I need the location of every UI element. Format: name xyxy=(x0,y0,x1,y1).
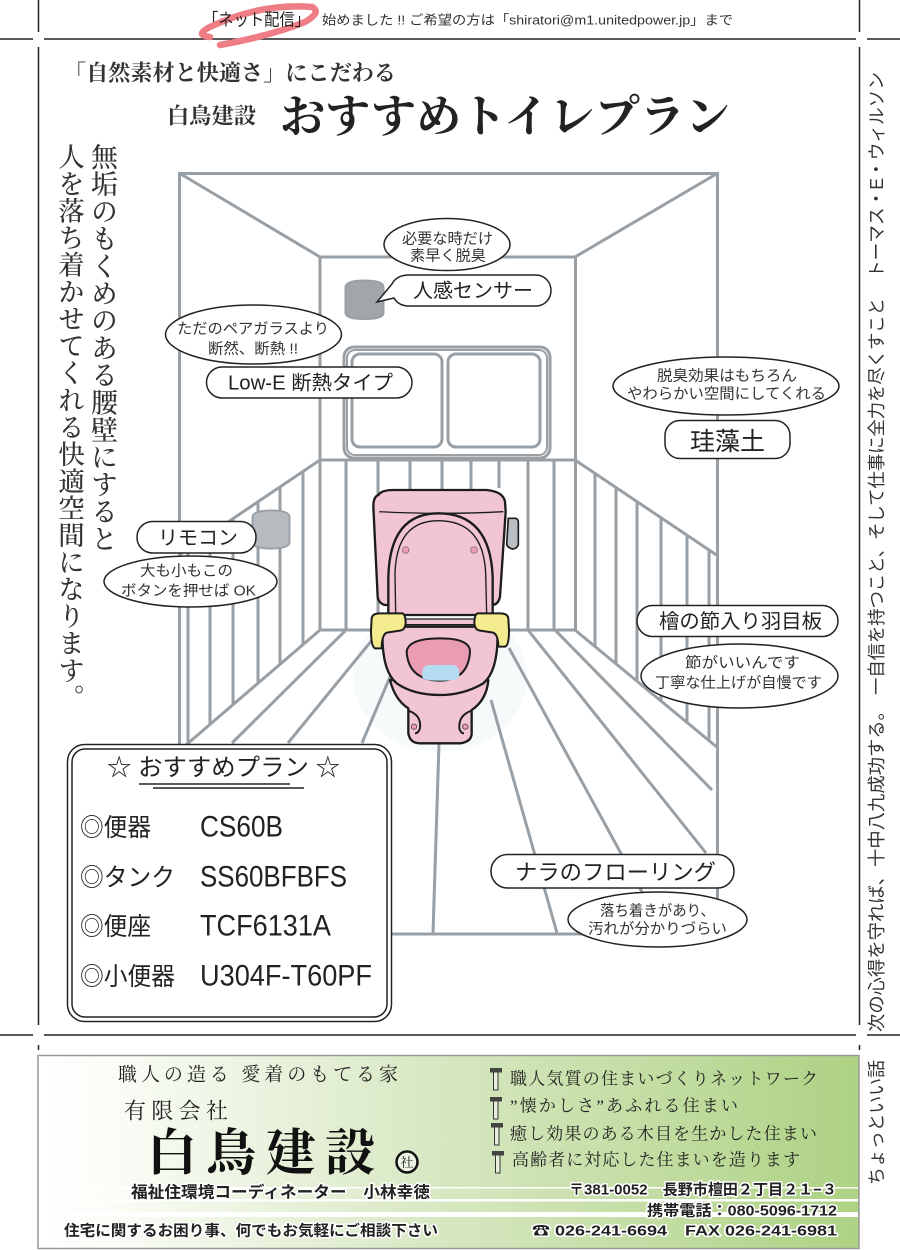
vertical copy: 無垢のもくめのある腰壁にすると xyxy=(87,143,118,552)
title xyxy=(64,60,730,142)
callout: cypress panelling: 節がいいんです xyxy=(685,654,800,672)
panel heading: ☆ おすすめプラン ☆ xyxy=(107,754,340,782)
panel: company footer xyxy=(38,1056,859,1248)
contact prompt: 住宅に関するお困り事、何でもお気軽にご相談下さい xyxy=(64,1222,438,1240)
feature list: 高齢者に対応した住まいを造ります xyxy=(512,1150,800,1170)
icon: hammers xyxy=(490,1068,504,1173)
row: toilet bowl: CS60B xyxy=(200,810,283,844)
row: seat: TCF6131A xyxy=(200,910,331,942)
callout: cypress panelling: 丁寧な仕上げが自慢です xyxy=(655,674,822,692)
side column quote xyxy=(867,72,887,1185)
row: urinal xyxy=(80,960,372,992)
icon: remote control xyxy=(252,510,290,548)
room line drawing xyxy=(179,173,718,934)
panel: recommended plan xyxy=(68,744,392,1022)
callout: diatomaceous earth: 脱臭効果はもちろん xyxy=(657,368,797,384)
contact details: 携帯電話：080-5096-1712 xyxy=(647,1202,837,1220)
callout: oak flooring: 落ち着きがあり、 xyxy=(600,902,715,920)
callout: sensor xyxy=(377,218,551,306)
icon: human sensor xyxy=(346,280,384,319)
callout: oak flooring: ナラのフローリング xyxy=(515,860,716,885)
callout: window: ただのペアガラスより xyxy=(177,320,329,338)
row: tank: SS60BFBFS xyxy=(200,860,347,894)
callout: diatomaceous earth xyxy=(613,357,839,458)
side column quote: 次の心得を守れば、十中八九成功する。 xyxy=(867,702,887,1032)
callout: window: 断然、断熱 !! xyxy=(208,340,298,358)
callout: cypress panelling xyxy=(637,606,838,708)
contact details xyxy=(532,1180,837,1240)
contact details: 〒381-0052 長野市檀田２丁目２１−３ xyxy=(569,1180,837,1198)
top notice xyxy=(203,10,733,30)
feature list: 職人気質の住まいづくりネットワーク xyxy=(510,1070,818,1088)
top notice: 始めました !! ご希望の方は「shiratori@m1.unitedpower.jp」まで xyxy=(322,12,733,28)
row: seat: ◎便座 xyxy=(80,913,151,941)
side column quote: 一自信を持つこと、そして仕事に全力を尽くすこと xyxy=(867,298,887,695)
vertical copy: 人を落ち着かせてくれる快適空間になります。 xyxy=(54,143,84,711)
contact details: ☎ 026-241-6694 FAX 026-241-6981 xyxy=(532,1222,837,1240)
subtitle: 「自然素材と快適さ」にこだわる xyxy=(64,60,396,86)
callout: remote: リモコン xyxy=(158,528,238,550)
row: seat xyxy=(80,910,331,942)
feature list: ”懐かしさ”あふれる住まい xyxy=(510,1096,738,1116)
row: toilet bowl xyxy=(80,810,283,844)
vertical copy xyxy=(54,143,118,711)
company logotype: 白鳥建設 xyxy=(147,1125,375,1181)
company name: 白鳥建設 xyxy=(167,104,256,128)
callout: oak flooring xyxy=(491,854,747,947)
callout: diatomaceous earth: 珪藻土 xyxy=(690,428,765,456)
company type: 有限会社 xyxy=(124,1098,228,1124)
toilet xyxy=(371,490,518,743)
callout: diatomaceous earth: やわらかい空間にしてくれる xyxy=(627,386,826,402)
callout: sensor: 必要な時だけ xyxy=(402,230,493,248)
row: toilet bowl: ◎便器 xyxy=(80,814,151,842)
callout: sensor: 人感センサー xyxy=(413,280,533,302)
callout: oak flooring: 汚れが分かりづらい xyxy=(588,920,727,938)
coordinator name: 福祉住環境コーディネーター 小林幸徳 xyxy=(131,1182,430,1202)
callout: remote: 大も小もこの xyxy=(140,562,233,580)
tagline: 職人の造る 愛着のもてる家 xyxy=(118,1064,398,1086)
window xyxy=(344,347,550,458)
callout: remote xyxy=(104,522,277,607)
callout: remote: ボタンを押せば OK xyxy=(121,582,256,600)
callout: window xyxy=(166,305,412,398)
icon: company seal: 社 xyxy=(400,1155,414,1170)
scribble: red highlight xyxy=(202,6,316,45)
row: tank: ◎タンク xyxy=(80,864,175,892)
callout: window: Low-E 断熱タイプ xyxy=(228,372,393,394)
feature list xyxy=(510,1070,818,1170)
top notice: 「ネット配信」 xyxy=(203,10,310,30)
toilet halo xyxy=(353,602,527,752)
callout: cypress panelling: 檜の節入り羽目板 xyxy=(659,610,822,633)
icon: company seal xyxy=(396,1152,418,1172)
callout: sensor: 素早く脱臭 xyxy=(410,248,486,264)
feature list: 癒し効果のある木目を生かした住まい xyxy=(510,1124,817,1144)
row: tank xyxy=(80,860,347,894)
side column quote: トーマス・E・ウィルソン xyxy=(867,72,887,278)
main heading: おすすめトイレプラン xyxy=(280,92,730,142)
row: urinal: ◎小便器 xyxy=(80,963,175,991)
side column quote: ちょっといい話 xyxy=(867,1060,887,1185)
row: urinal: U304F-T60PF xyxy=(200,960,372,992)
